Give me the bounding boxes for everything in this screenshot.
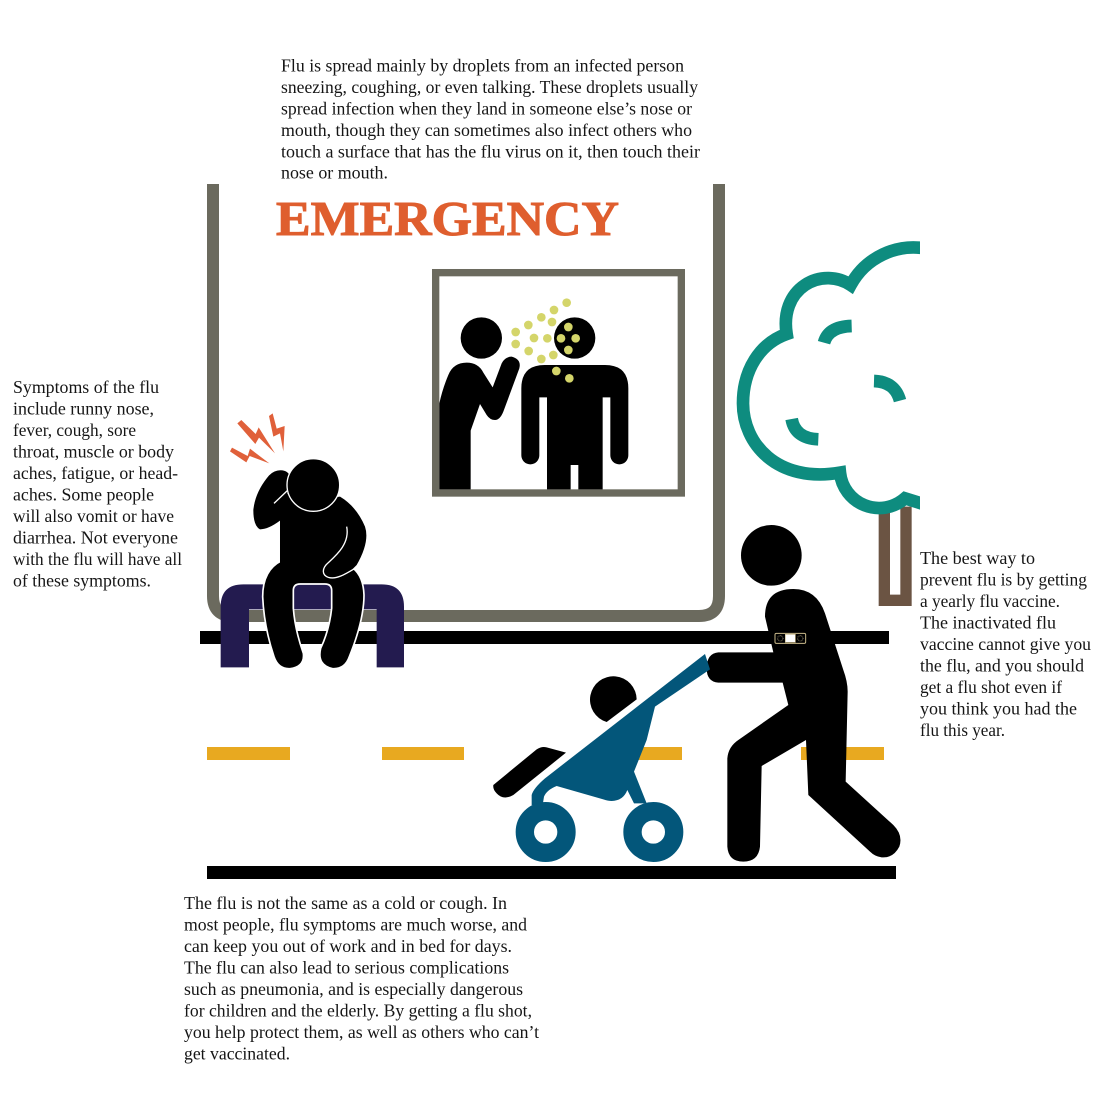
- text block: prevention: you think you had the: [920, 698, 1077, 718]
- seated figure: [253, 459, 366, 669]
- bench: [221, 584, 404, 667]
- text block: flu versus cold: get vaccinated.: [184, 1044, 290, 1064]
- text block: symptoms: include runny nose,: [13, 398, 154, 418]
- droplets: [511, 298, 580, 383]
- text block: flu versus cold: you help protect them, as well as others who can’t: [184, 1022, 539, 1042]
- text block: symptoms: [13, 377, 182, 590]
- icon: person being exposed: [521, 317, 628, 489]
- child head: [590, 676, 637, 722]
- text block: how flu spreads: touch a surface that has the flu virus on it, then touch their: [281, 142, 700, 162]
- text block: prevention: [920, 548, 1091, 740]
- road centre dashes: [207, 747, 884, 760]
- text block: flu versus cold: The flu can also lead to serious complications: [184, 958, 509, 978]
- text block: symptoms: of these symptoms.: [13, 570, 151, 590]
- text block: flu versus cold: [184, 893, 539, 1064]
- icon: tree: [743, 247, 927, 600]
- text block: how flu spreads: nose or mouth.: [281, 162, 388, 182]
- text block: how flu spreads: spread infection when they land in someone else’s nose or: [281, 98, 692, 118]
- text block: how flu spreads: [281, 56, 700, 182]
- text block: symptoms: with the flu will have all: [13, 549, 182, 569]
- text block: flu versus cold: for children and the elderly. By getting a flu shot,: [184, 1000, 532, 1020]
- icon: sick person on bench: [221, 413, 404, 669]
- stroller frame: [532, 654, 710, 805]
- text block: symptoms: Symptoms of the flu: [13, 377, 159, 397]
- text block: prevention: The inactivated flu: [920, 612, 1056, 632]
- text block: prevention: get a flu shot even if: [920, 677, 1062, 697]
- headache lightning bolts: [230, 413, 285, 463]
- text block: how flu spreads: mouth, though they can sometimes also infect others who: [281, 120, 692, 140]
- text block: flu versus cold: The flu is not the same as a cold or cough. In: [184, 893, 507, 913]
- text block: flu versus cold: most people, flu symptoms are much worse, and: [184, 914, 527, 934]
- text block: symptoms: will also vomit or have: [13, 506, 174, 526]
- adult figure: [707, 525, 900, 862]
- text block: prevention: prevent flu is by getting: [920, 570, 1087, 590]
- text block: flu versus cold: can keep you out of work and in bed for days.: [184, 936, 512, 956]
- stroller wheels: [525, 811, 674, 853]
- text block: prevention: flu this year.: [920, 720, 1005, 740]
- sidewalk line: [200, 631, 889, 644]
- child legs: [493, 747, 566, 797]
- heading: EMERGENCY sign: EMERGENCY: [276, 191, 619, 246]
- text block: flu versus cold: such as pneumonia, and is especially dangerous: [184, 979, 523, 999]
- text block: prevention: a yearly flu vaccine.: [920, 591, 1060, 611]
- text block: symptoms: throat, muscle or body: [13, 442, 174, 462]
- text block: prevention: vaccine cannot give you: [920, 634, 1091, 654]
- icon: sneezing person: [439, 317, 520, 489]
- road bottom line: [207, 866, 896, 879]
- text block: symptoms: fever, cough, sore: [13, 420, 136, 440]
- icon: stroller and adult pushing: [493, 525, 900, 862]
- panel: window showing droplet spread: [436, 273, 681, 493]
- text block: symptoms: aches. Some people: [13, 484, 154, 504]
- bandage on arm: [775, 633, 806, 643]
- text block: how flu spreads: sneezing, coughing, or even talking. These droplets usually: [281, 77, 698, 97]
- text block: symptoms: diarrhea. Not everyone: [13, 528, 178, 548]
- tree trunk: [884, 507, 906, 600]
- text block: how flu spreads: Flu is spread mainly by droplets from an infected person: [281, 56, 684, 76]
- text block: prevention: the flu, and you should: [920, 656, 1084, 676]
- text block: prevention: The best way to: [920, 548, 1035, 568]
- text block: symptoms: aches, fatigue, or head-: [13, 463, 178, 483]
- building outline: [213, 184, 719, 616]
- tree crown: [743, 247, 927, 508]
